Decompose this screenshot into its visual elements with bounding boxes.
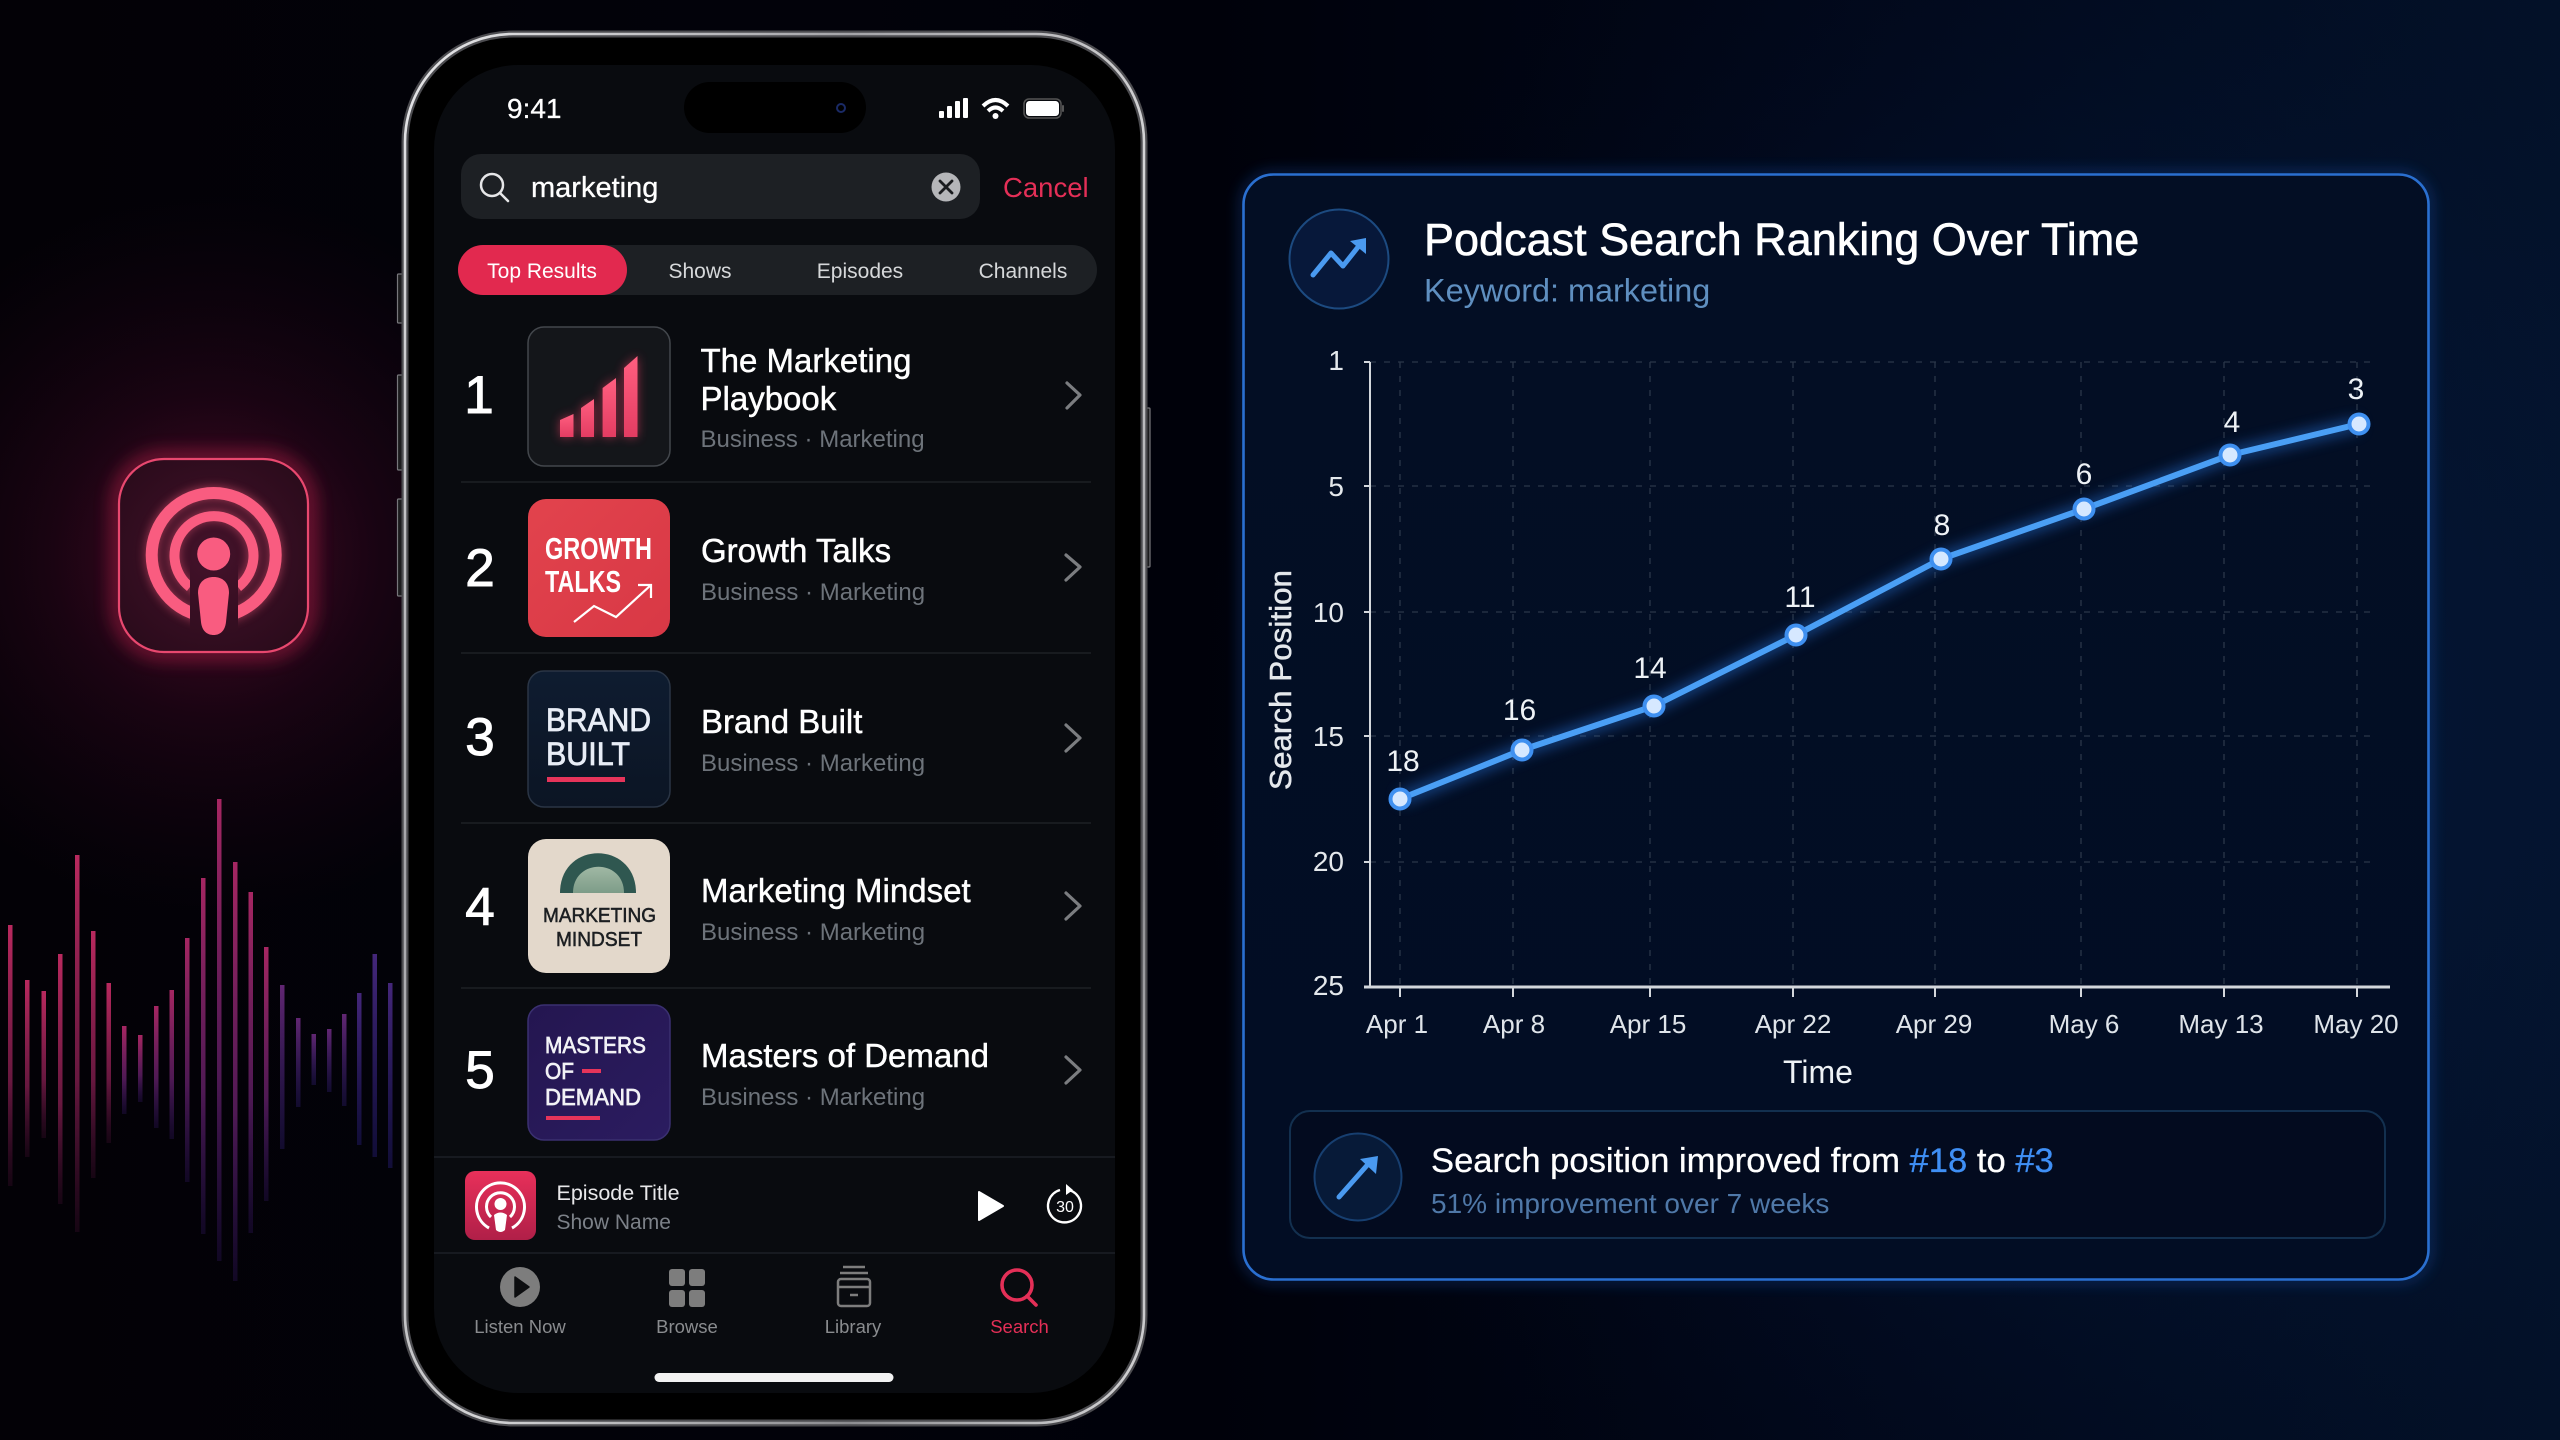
data labels: 18 (1386, 745, 1420, 778)
phone (398, 34, 1150, 1423)
result row 4 (465, 839, 1080, 973)
icon: skip 30: 30 (1056, 1199, 1074, 1216)
data labels: 8 (1934, 509, 1950, 542)
cover: Brand Built (528, 671, 670, 807)
filter tabs: Top Results (487, 260, 597, 283)
cover: Brand Built: BUILT (546, 736, 630, 772)
cover: Marketing Mindset: MINDSET (556, 929, 642, 951)
callout detail: 51% improvement over 7 weeks (1431, 1188, 1829, 1219)
tab: Browse: Browse (656, 1316, 718, 1337)
card frame (1244, 174, 2428, 1280)
cover: Marketing Mindset: MARKETING (543, 905, 656, 927)
x-axis labels: Apr 1 (1366, 1009, 1428, 1039)
result row 5: Masters of Demand (701, 1037, 989, 1074)
data labels: 16 (1503, 694, 1536, 727)
y-axis title: Search Position (1263, 570, 1298, 790)
callout headline: Search position improved from #18 to #3 (1431, 1142, 2054, 1180)
mini player (434, 1157, 1115, 1253)
result row 4: 4 (465, 878, 495, 937)
x-axis labels: May 20 (2313, 1009, 2399, 1039)
cancel button: Cancel (1003, 172, 1089, 203)
ranking line glow (1400, 424, 2359, 799)
chart title: Podcast Search Ranking Over Time (1424, 214, 2139, 265)
panel: ranking chart (1244, 174, 2428, 1280)
cover: Masters of Demand (528, 1005, 670, 1140)
phone screen (434, 65, 1115, 1393)
mini player: Episode Title (556, 1181, 680, 1205)
search bar: marketing (531, 172, 658, 204)
tab: Library (825, 1267, 882, 1337)
cover: Growth Talks: TALKS (545, 564, 621, 599)
y-axis labels: 15 (1313, 721, 1344, 752)
data labels (1386, 373, 2364, 778)
home indicator (654, 1373, 894, 1382)
filter tabs: Channels (979, 260, 1067, 283)
chart subtitle: Keyword: marketing (1424, 272, 1710, 308)
result row 1 (464, 327, 1080, 466)
filter tabs: Episodes (817, 260, 903, 283)
result row 2: 2 (465, 539, 495, 598)
data labels: 3 (2348, 373, 2364, 406)
line chart (1263, 345, 2399, 1090)
result row 1: The Marketing (700, 342, 911, 379)
x-axis labels (1366, 1009, 2399, 1039)
phone metal rim (405, 34, 1144, 1423)
result row 5: 5 (465, 1041, 495, 1100)
result row 1: Playbook (700, 380, 837, 417)
result row 1: 1 (464, 366, 494, 425)
result row 4: Marketing Mindset (701, 872, 971, 909)
cover: Brand Built: BRAND (546, 702, 651, 738)
phone side buttons (398, 274, 1150, 596)
icon: trending up (1290, 210, 1388, 308)
callout: improvement summary (1290, 1111, 2385, 1238)
data labels: 6 (2076, 458, 2092, 491)
cover: Growth Talks (528, 499, 670, 637)
x-axis labels: Apr 15 (1610, 1009, 1686, 1039)
result row 2 (465, 499, 1080, 637)
result row 1: Business · Marketing (700, 426, 925, 453)
cover: Masters of Demand: MASTERS (545, 1032, 646, 1058)
axes (1364, 362, 2390, 997)
tab bar (474, 1267, 1049, 1337)
tab: Listen Now: Listen Now (474, 1316, 566, 1337)
y-axis labels: 1 (1328, 345, 1344, 376)
y-axis labels: 20 (1313, 846, 1344, 877)
x-axis labels: Apr 8 (1483, 1009, 1545, 1039)
result row 3: 3 (465, 708, 495, 767)
result row 3: Business · Marketing (701, 750, 925, 777)
result row 5: Business · Marketing (701, 1084, 925, 1111)
mini player: Show Name (556, 1211, 671, 1234)
y-axis labels (1313, 345, 1344, 1001)
cover: Marketing Mindset (528, 839, 670, 973)
search bar (461, 154, 980, 219)
phone body (405, 34, 1144, 1423)
result row 2: Business · Marketing (701, 579, 925, 606)
tab: Search: Search (990, 1316, 1049, 1337)
x-axis title: Time (1783, 1054, 1853, 1090)
ranking line (1400, 424, 2359, 799)
x-axis labels: May 13 (2178, 1009, 2264, 1039)
filter tabs: Shows (668, 260, 732, 283)
result row 2: Growth Talks (701, 532, 891, 569)
data labels: 14 (1633, 652, 1667, 685)
cover: The Marketing Playbook (528, 327, 670, 466)
x-axis labels: Apr 22 (1755, 1009, 1831, 1039)
x-axis labels: May 6 (2049, 1009, 2119, 1039)
result row 3 (465, 671, 1080, 807)
result row 4: Business · Marketing (701, 919, 925, 946)
y-axis labels: 10 (1313, 597, 1344, 628)
y-axis labels: 5 (1328, 471, 1344, 502)
icon: mini podcast app (465, 1171, 536, 1240)
icon: arrow up right (1314, 1134, 1402, 1220)
tab: Listen Now (474, 1267, 566, 1337)
icon: glowing podcast app (118, 458, 309, 653)
tab: Browse (656, 1269, 718, 1337)
icon: play (979, 1192, 1003, 1220)
status bar: 9:41 (507, 93, 562, 124)
data labels: 4 (2224, 406, 2240, 439)
result row 3: Brand Built (701, 703, 862, 740)
data points (1390, 414, 2368, 808)
x-axis labels: Apr 29 (1896, 1009, 1972, 1039)
icon: skip 30 (1048, 1184, 1081, 1222)
result row 5 (465, 1005, 1080, 1140)
cover: Masters of Demand: OF (545, 1058, 574, 1084)
tab: Search (990, 1270, 1049, 1337)
data labels: 11 (1784, 581, 1816, 614)
y-axis labels: 25 (1313, 970, 1344, 1001)
waveform (8, 799, 392, 1281)
cover: Masters of Demand: DEMAND (545, 1084, 641, 1110)
cover: Growth Talks: GROWTH (545, 531, 652, 566)
filter tabs (458, 245, 1097, 295)
tab: Library: Library (825, 1316, 882, 1337)
status bar (507, 82, 1064, 133)
